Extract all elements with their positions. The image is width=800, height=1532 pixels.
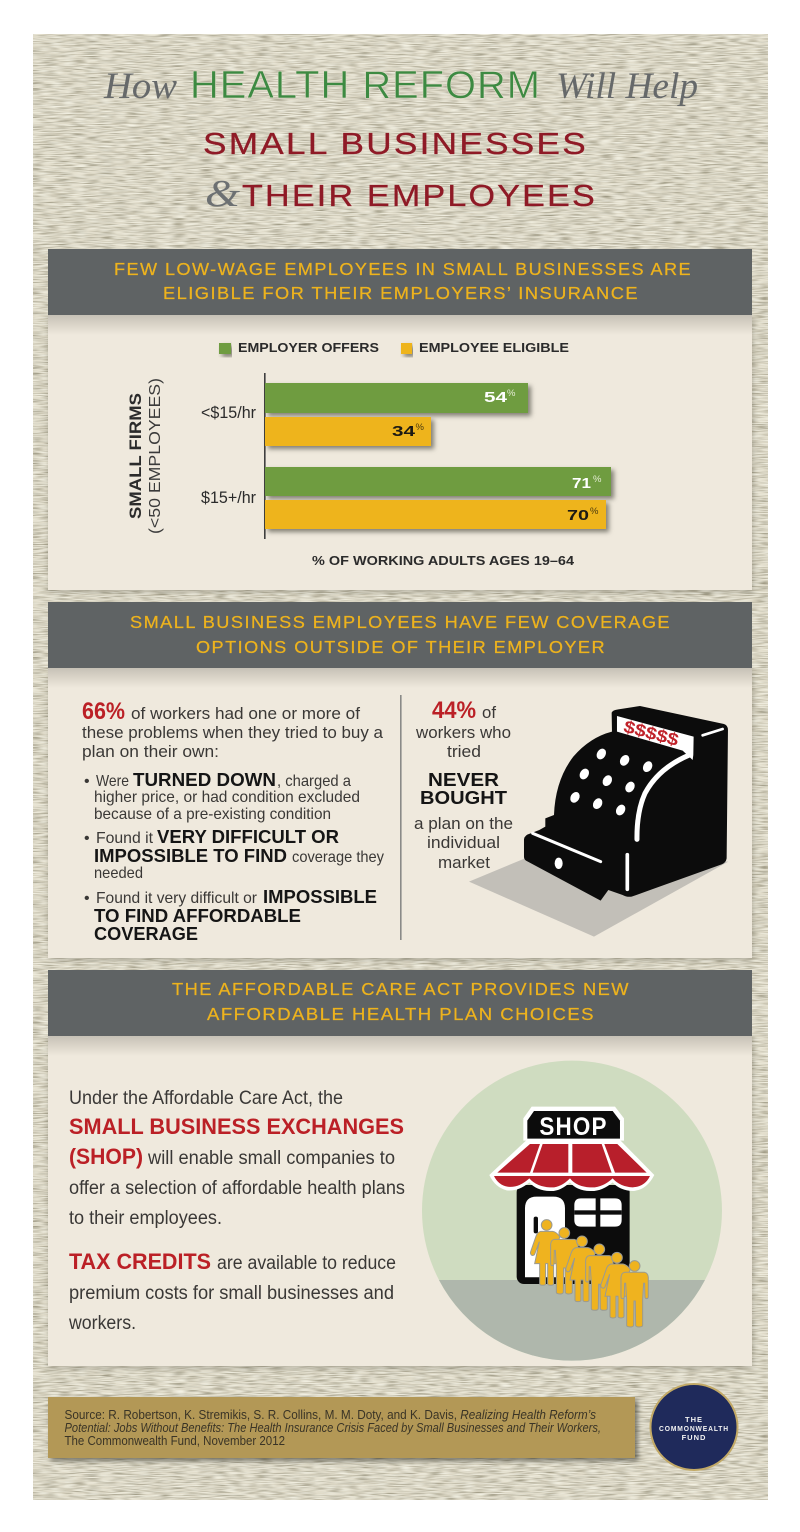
text block: 66 percent: plan on their own: (82, 742, 219, 761)
heading (48, 602, 752, 668)
bullet: very difficult: coverage they (292, 849, 384, 866)
title (103, 64, 698, 215)
bar: employer offers 15 plus: % (593, 474, 602, 485)
bar chart (201, 373, 611, 539)
text block: 44 percent: individual (427, 833, 500, 852)
bar: employer offers under 15: 54 (484, 389, 508, 406)
bullet: very difficult: • (84, 830, 90, 847)
text block: 44 percent: tried (447, 742, 481, 761)
text block: 44 percent: a plan on the (414, 814, 513, 833)
source note: Potential: Jobs Without Benefits: The Health Insurance Crisis Faced by Small Businesses and Their Workers, (64, 1420, 601, 1435)
text block: exchanges: to their employees. (69, 1208, 222, 1229)
text block: tax credits: are available to reduce (217, 1253, 396, 1274)
logo: the commonwealth fund: THE (685, 1415, 703, 1424)
bar: employee eligible under 15: % (416, 422, 424, 433)
bar: employee eligible under 15 (265, 417, 431, 446)
heading: ELIGIBLE FOR THEIR EMPLOYERS’ INSURANCE (163, 283, 639, 303)
bullet: turned down: TURNED DOWN (133, 770, 276, 790)
text block: exchanges: Under the Affordable Care Act, the (69, 1088, 343, 1109)
logo: the commonwealth fund: COMMONWEALTH (659, 1424, 729, 1433)
row label: under 15: <$15/hr (201, 403, 256, 422)
shop awning (489, 1140, 654, 1191)
bullet: impossible: IMPOSSIBLE (263, 887, 377, 907)
text block: 44 percent: BOUGHT (420, 788, 507, 808)
panel: coverage options (48, 602, 752, 958)
text block: exchanges: SMALL BUSINESS EXCHANGES (69, 1114, 404, 1139)
text block: 44 percent: NEVER (428, 770, 499, 790)
text block: 44 percent: of (482, 703, 496, 722)
title line 3 (205, 173, 597, 215)
bullet: impossible: Found it very difficult or (96, 890, 258, 907)
heading: OPTIONS OUTSIDE OF THEIR EMPLOYER (196, 637, 606, 657)
bar: employer offers 15 plus: 71 (572, 475, 591, 492)
bullet: turned down: Were (96, 773, 129, 790)
bar: employer offers under 15: % (507, 388, 516, 399)
shop sign: SHOP (539, 1113, 608, 1141)
heading: AFFORDABLE HEALTH PLAN CHOICES (207, 1004, 595, 1024)
bullet: impossible: • (84, 890, 90, 907)
title line 2: SMALL BUSINESSES (203, 126, 588, 161)
bar: employer offers under 15 (265, 383, 528, 413)
axis title: small firms: (<50 EMPLOYEES) (147, 378, 164, 534)
text block: tax credits: workers. (68, 1313, 136, 1334)
register shadow (469, 858, 728, 937)
text block: 66 percent: 66% (82, 698, 125, 725)
circle backdrop (422, 1061, 722, 1361)
text block: tax credits (68, 1249, 396, 1334)
shop building (517, 1185, 630, 1284)
bullet: turned down: • (84, 773, 90, 790)
title line 1: How (103, 66, 177, 107)
axis title: small firms: SMALL FIRMS (126, 393, 145, 519)
bullet: very difficult: needed (94, 865, 143, 882)
bullet: impossible: COVERAGE (94, 924, 198, 944)
text block: exchanges: will enable small companies to (147, 1148, 395, 1169)
row label: 15 plus: $15+/hr (201, 488, 256, 507)
bullet: very difficult (84, 827, 384, 882)
bullet: turned down: because of a pre-existing condition (94, 806, 331, 823)
heading (48, 970, 752, 1036)
register body (524, 706, 728, 901)
text block: 44 percent (414, 697, 513, 872)
bullet: very difficult: VERY DIFFICULT OR (157, 827, 339, 847)
bar: employee eligible 15 plus: % (590, 506, 599, 517)
text block: exchanges: (SHOP) (69, 1144, 143, 1169)
text block: 44 percent: 44% (432, 697, 476, 724)
queue of people (530, 1220, 648, 1327)
text block: 66 percent: these problems when they tried to buy a (82, 723, 384, 742)
panel: affordable care act (48, 970, 752, 1366)
icon: shop illustration (422, 1061, 722, 1361)
heading: THE AFFORDABLE CARE ACT PROVIDES NEW (172, 979, 630, 999)
panel background (48, 668, 752, 958)
bullet: turned down: higher price, or had condition excluded (94, 789, 360, 806)
text block: 66 percent: of workers had one or more of (131, 704, 360, 723)
panel: low-wage eligibility (48, 249, 752, 590)
text block: tax credits: premium costs for small businesses and (69, 1283, 394, 1304)
title line 1 (103, 64, 698, 107)
bullet: impossible: TO FIND AFFORDABLE (94, 906, 301, 926)
register keys (555, 747, 654, 869)
icon: cash register (469, 706, 728, 937)
bullet: impossible (84, 887, 377, 944)
shop sign (523, 1107, 624, 1141)
source note: The Commonwealth Fund, November 2012 (64, 1433, 285, 1448)
title line 3: & (205, 173, 241, 215)
axis caption: % OF WORKING ADULTS AGES 19–64 (312, 554, 574, 568)
legend (219, 341, 569, 355)
bar: employer offers 15 plus (265, 467, 611, 496)
register label (617, 716, 694, 760)
register price: $$$$$ (622, 716, 681, 750)
bullet: very difficult: Found it (96, 830, 154, 847)
text block: exchanges: offer a selection of affordable health plans (69, 1178, 405, 1199)
title line 3: THEIR EMPLOYEES (242, 178, 597, 213)
bar: employee eligible 15 plus (265, 500, 606, 529)
text block: 44 percent: workers who (415, 723, 511, 742)
bullet: very difficult: IMPOSSIBLE TO FIND (94, 846, 287, 866)
heading: SMALL BUSINESS EMPLOYEES HAVE FEW COVERAGE (130, 612, 671, 632)
bullet: turned down: , charged a (277, 773, 351, 790)
register detail lines (533, 729, 723, 889)
panel background (48, 1036, 752, 1366)
bullet: turned down (84, 770, 360, 823)
legend: EMPLOYER OFFERS (238, 341, 379, 355)
text block: exchanges (69, 1088, 405, 1229)
title line 1: Will Help (556, 66, 698, 107)
axis title: small firms (126, 378, 164, 534)
logo: the commonwealth fund (650, 1384, 738, 1470)
title line 1: HEALTH REFORM (190, 64, 541, 107)
text block: tax credits: TAX CREDITS (69, 1249, 211, 1274)
source note (48, 1397, 635, 1458)
bar: employee eligible 15 plus: 70 (567, 507, 589, 524)
legend: EMPLOYEE ELIGIBLE (419, 341, 569, 355)
heading (48, 249, 752, 315)
logo: the commonwealth fund: FUND (682, 1433, 706, 1442)
source note: Source: R. Robertson, K. Stremikis, S. R. Collins, M. M. Doty, and K. Davis, Realizing Health Reform’s (64, 1407, 596, 1422)
text block: 66 percent (82, 698, 384, 761)
panel background (48, 315, 752, 590)
bar: employee eligible under 15: 34 (392, 423, 416, 440)
text block: 44 percent: market (438, 853, 490, 872)
heading: FEW LOW-WAGE EMPLOYEES IN SMALL BUSINESSES ARE (114, 259, 692, 279)
